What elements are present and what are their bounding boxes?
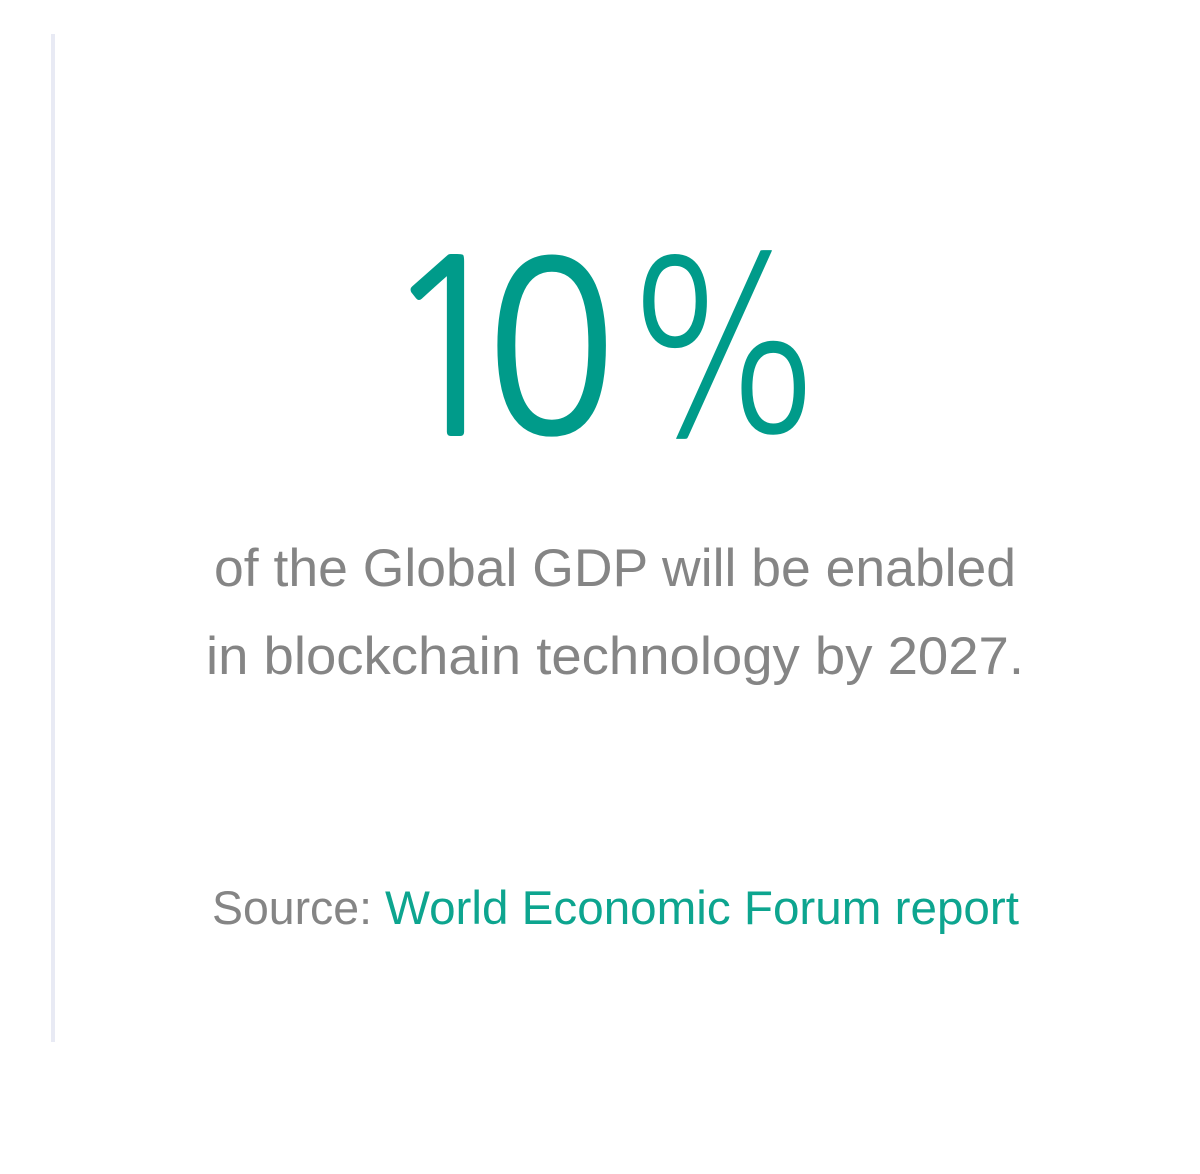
big statistic: 10%: 0: [485, 230, 617, 468]
vertical side rule: [51, 34, 55, 1042]
big statistic: 10%: [379, 227, 831, 471]
source line: Source:: [212, 881, 372, 934]
description text: of the Global GDP will be enabled: [214, 539, 1016, 598]
big statistic: 10%: %: [618, 229, 831, 471]
description text: in blockchain technology by 2027.: [206, 627, 1024, 686]
big statistic: 10%: 1: [379, 227, 518, 469]
source link text: World Economic Forum report: [385, 881, 1019, 934]
description text: [206, 539, 1024, 686]
